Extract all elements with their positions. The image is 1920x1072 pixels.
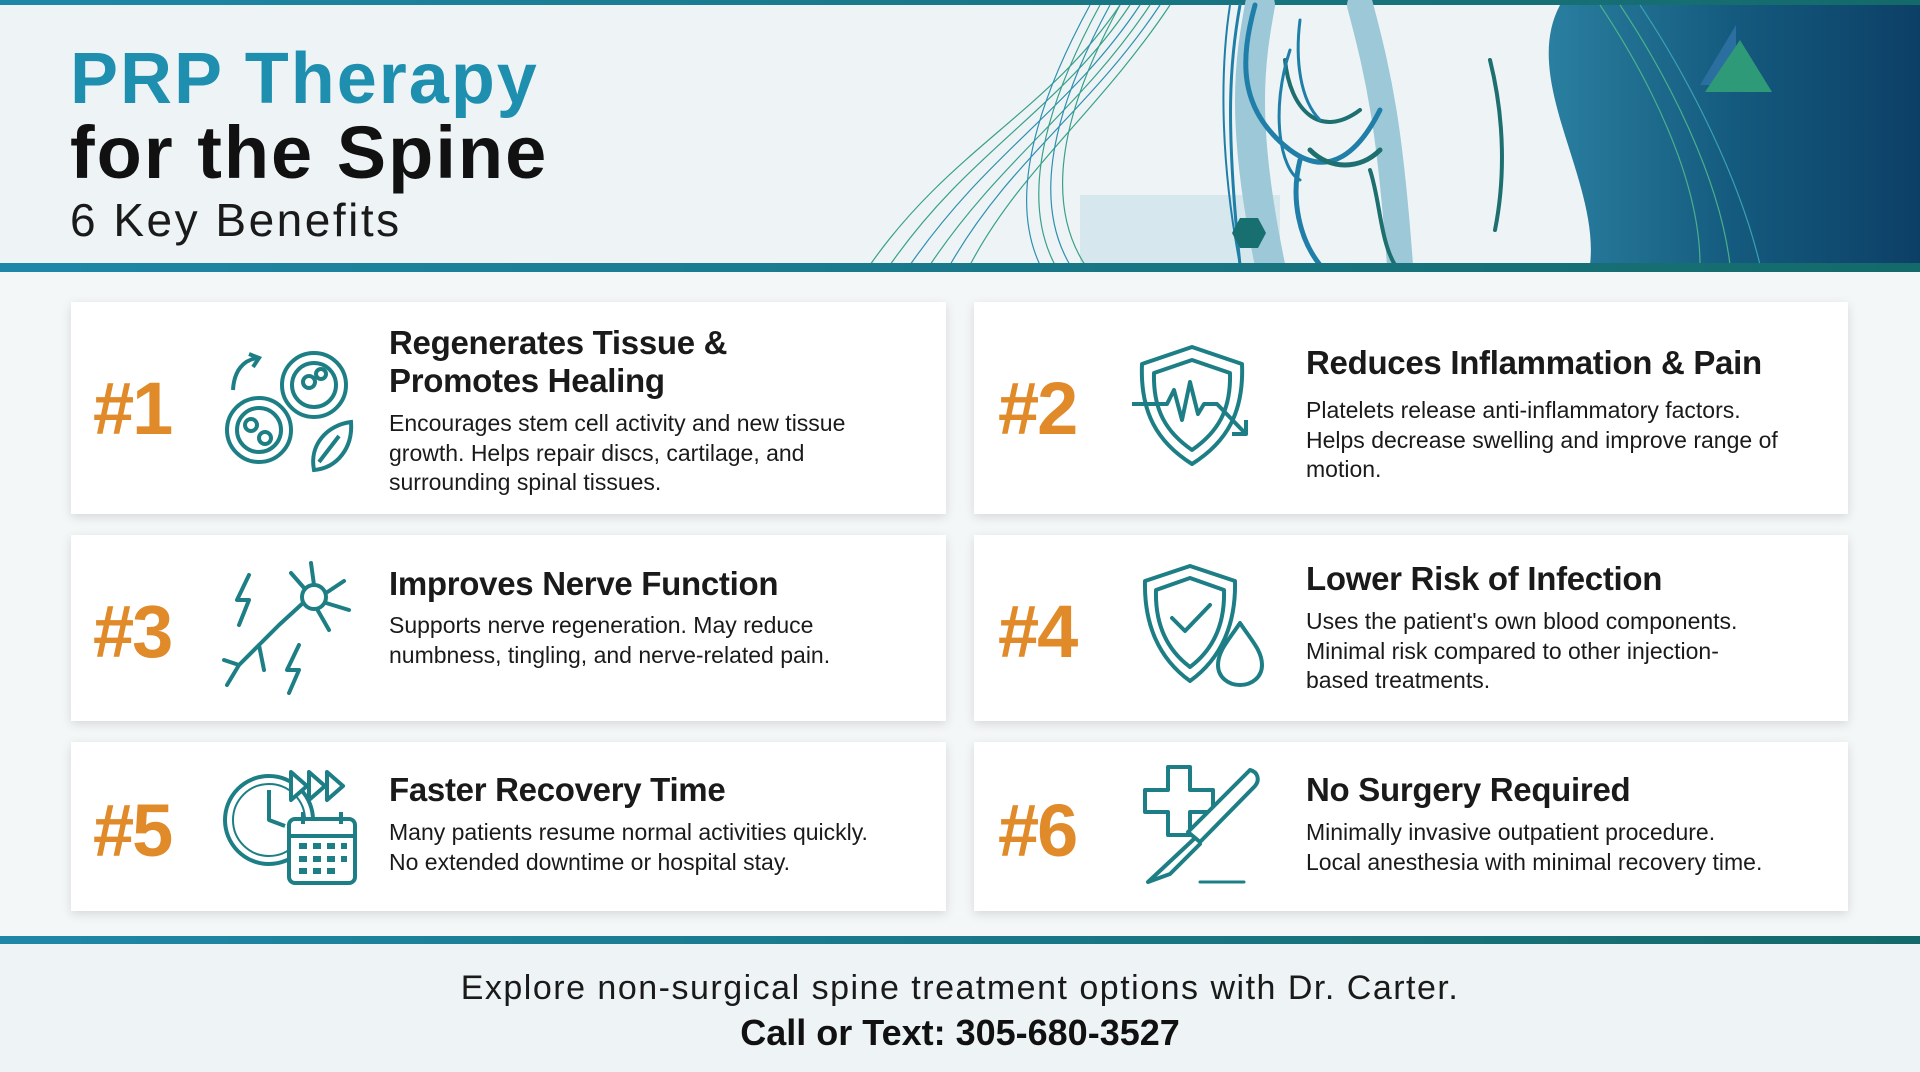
icon: nerves xyxy=(222,561,352,695)
footer xyxy=(0,936,1920,1072)
number 2: #2 xyxy=(998,367,1076,450)
body text: Encourages stem cell activity and new tissue xyxy=(389,410,845,436)
icon: shield drop xyxy=(1142,564,1264,687)
heading: Reduces Inflammation & Pain xyxy=(1306,344,1762,381)
body text: surrounding spinal tissues. xyxy=(389,469,661,495)
heading: Lower Risk of Infection xyxy=(1306,560,1662,597)
body text xyxy=(389,819,868,875)
number 3: #3 xyxy=(93,590,171,673)
heading: No Surgery Required xyxy=(1306,771,1630,808)
panel: benefit 4 xyxy=(974,535,1848,721)
body text xyxy=(1306,397,1778,482)
panel: benefit 6 xyxy=(974,742,1848,911)
body text: Many patients resume normal activities quickly. xyxy=(389,819,868,845)
body text: numbness, tingling, and nerve-related pain. xyxy=(389,642,830,668)
panel: benefit 3 xyxy=(71,535,946,721)
body text: Local anesthesia with minimal recovery time. xyxy=(1306,848,1762,874)
icon: cells xyxy=(225,351,354,472)
body text xyxy=(1306,608,1737,693)
panel: benefit 1 xyxy=(71,302,946,514)
footer text: Call or Text: 305-680-3527 xyxy=(740,1012,1180,1053)
body text: Minimally invasive outpatient procedure. xyxy=(1306,819,1715,845)
body text: Minimal risk compared to other injection- xyxy=(1306,638,1719,664)
footer text xyxy=(461,969,1459,1053)
title: PRP Therapy xyxy=(70,39,539,119)
body text: Helps decrease swelling and improve range of xyxy=(1306,426,1778,452)
icon: cross scalpel xyxy=(1143,765,1260,884)
number 1: #1 xyxy=(93,367,171,450)
body text: growth. Helps repair discs, cartilage, and xyxy=(389,440,804,466)
icon: shield pulse xyxy=(1132,345,1248,466)
panel: benefit 2 xyxy=(974,302,1848,514)
body text: based treatments. xyxy=(1306,667,1490,693)
body text: motion. xyxy=(1306,456,1381,482)
panel: benefit 5 xyxy=(71,742,946,911)
body text xyxy=(1306,819,1762,875)
body text xyxy=(389,612,830,668)
heading: Improves Nerve Function xyxy=(389,565,778,602)
title: for the Spine xyxy=(70,111,548,194)
number 4: #4 xyxy=(998,590,1076,673)
heading: Regenerates Tissue & xyxy=(389,324,727,361)
heading: Promotes Healing xyxy=(389,362,665,399)
body text xyxy=(389,410,845,495)
body text: Supports nerve regeneration. May reduce xyxy=(389,612,813,638)
title xyxy=(70,39,548,246)
body text: Uses the patient's own blood components. xyxy=(1306,608,1737,634)
number 5: #5 xyxy=(93,789,171,872)
title: 6 Key Benefits xyxy=(70,194,402,246)
heading xyxy=(389,324,727,399)
body text: No extended downtime or hospital stay. xyxy=(389,848,790,874)
body text: Platelets release anti-inflammatory factors. xyxy=(1306,397,1741,423)
footer text: Explore non-surgical spine treatment options with Dr. Carter. xyxy=(461,969,1459,1007)
icon: clock calendar xyxy=(223,770,357,885)
header background xyxy=(0,0,1920,272)
heading: Faster Recovery Time xyxy=(389,771,725,808)
header art xyxy=(0,0,1920,272)
number 6: #6 xyxy=(998,789,1076,872)
